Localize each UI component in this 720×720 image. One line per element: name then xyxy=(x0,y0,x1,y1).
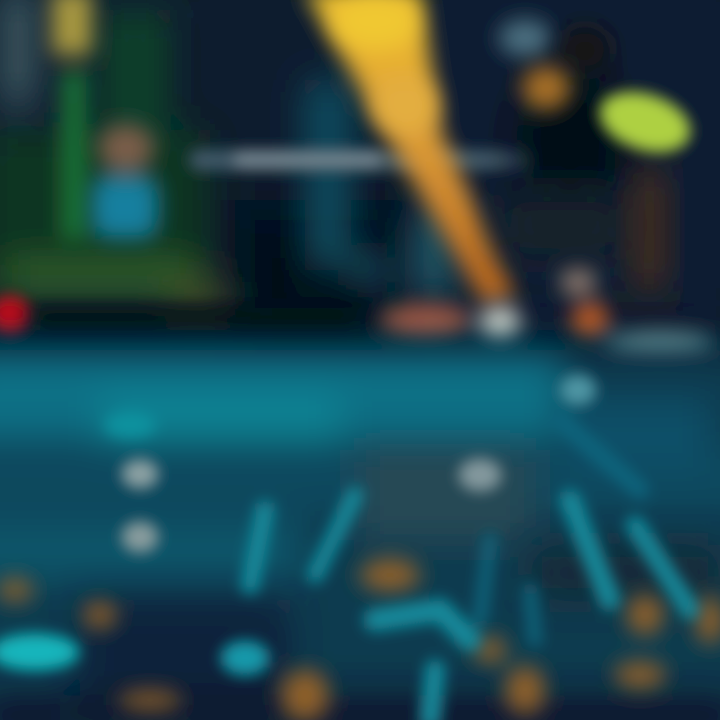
panel: green area left xyxy=(0,0,230,309)
orange speckles xyxy=(0,559,720,720)
yellow beam xyxy=(305,0,515,305)
orange and white feet xyxy=(379,270,715,357)
pale highlights xyxy=(122,375,596,552)
teal strokes xyxy=(250,420,690,720)
figure on right xyxy=(499,20,666,295)
upper dark backdrop xyxy=(0,0,720,330)
dark shoreline xyxy=(30,308,360,330)
lime oval xyxy=(593,82,697,162)
faint heading band xyxy=(190,150,535,170)
green and yellow vertical stripe xyxy=(52,0,92,240)
red marker xyxy=(0,296,30,332)
bright cyan patches xyxy=(0,412,269,675)
dark lower floor xyxy=(0,545,720,720)
central teal column xyxy=(305,80,451,295)
blue figure xyxy=(92,124,158,238)
panel: teal water xyxy=(0,350,720,720)
